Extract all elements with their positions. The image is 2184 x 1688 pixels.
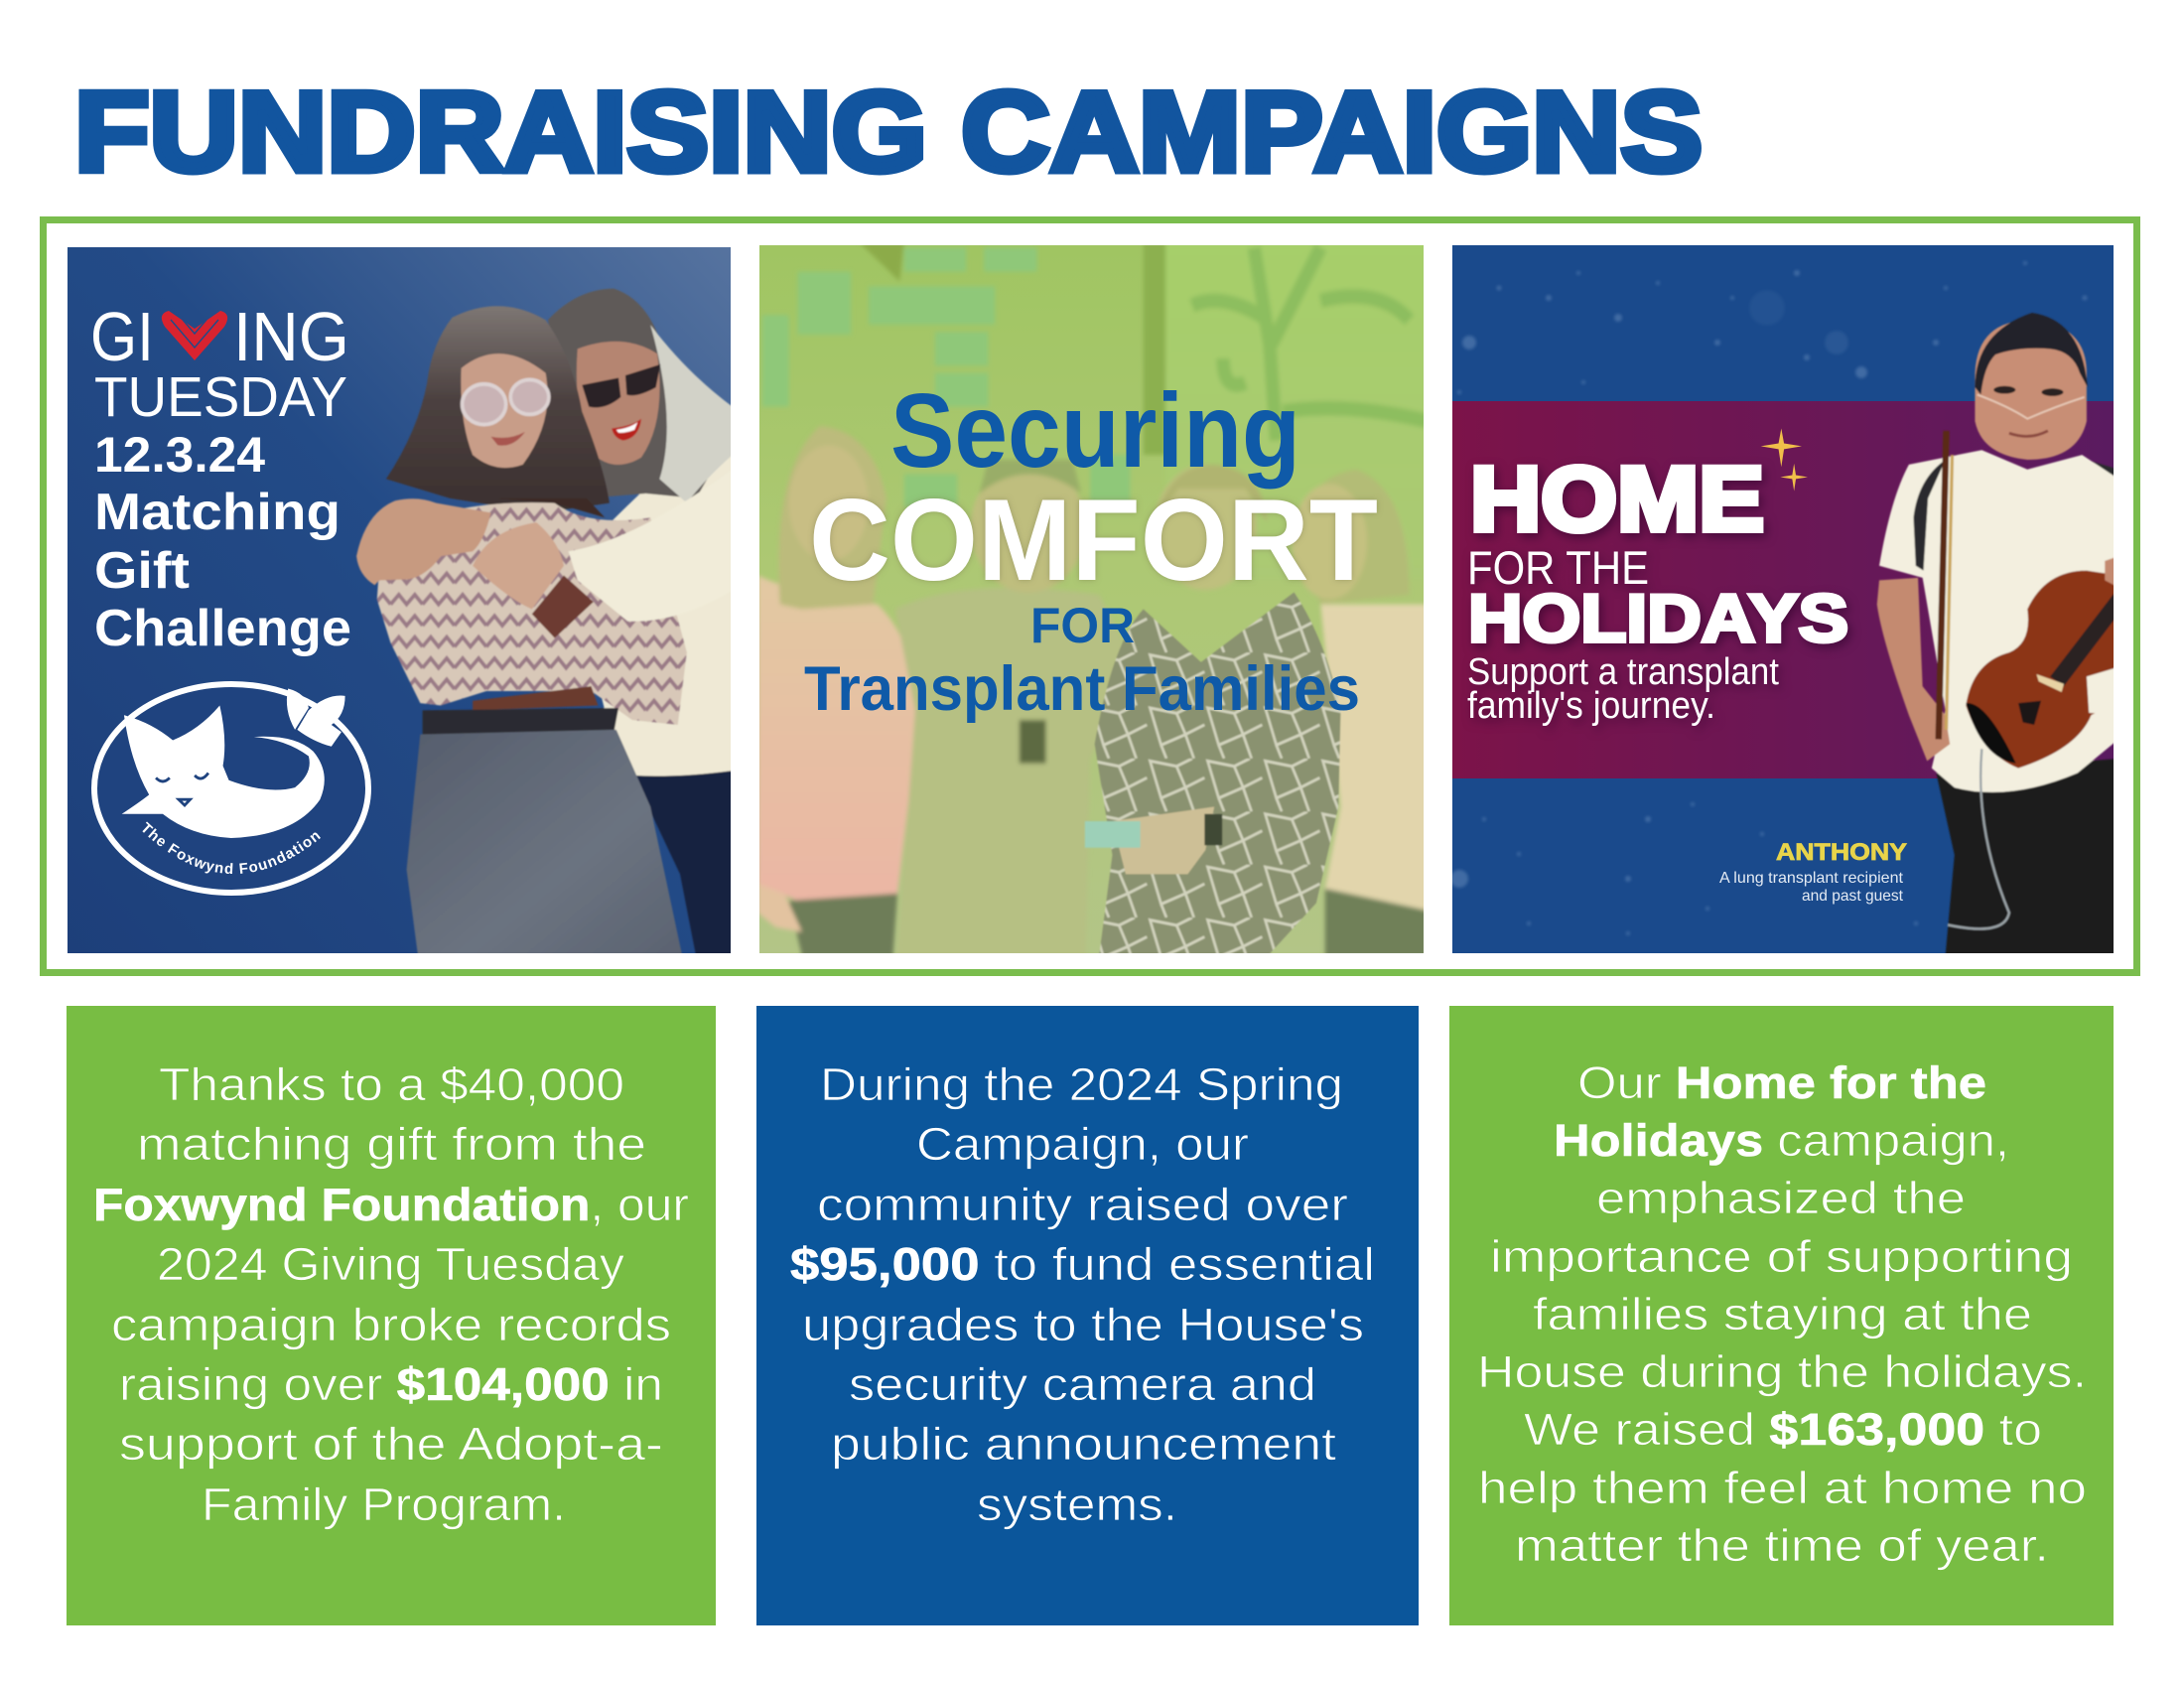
- text: Home for the Holidays headline: FOR THE: [1467, 541, 1649, 594]
- text: Home for the Holidays headline: Support a transplant: [1467, 651, 1779, 693]
- text: Securing Comfort headline: COMFORT: [809, 475, 1378, 605]
- panel: Home for the Holidays description: We raised $163,000 to: [1524, 1404, 2042, 1455]
- panel: Home for the Holidays description: House during the holidays.: [1477, 1346, 2087, 1397]
- panel: Spring Campaign description: security camera and: [849, 1358, 1316, 1410]
- photo: four people with green overlay: [757, 243, 1427, 956]
- text: Giving Tuesday heading: ING: [233, 298, 349, 375]
- maroon banner: [1451, 401, 2114, 778]
- snow speckles: [1450, 261, 2087, 935]
- text: Giving Tuesday heading: [90, 298, 351, 657]
- text: Giving Tuesday heading: 12.3.24: [94, 427, 265, 483]
- panel: Giving Tuesday description: raising over $104,000 in: [119, 1358, 663, 1410]
- text: Giving Tuesday heading: TUESDAY: [94, 365, 347, 429]
- text: Home for the Holidays headline: family's journey.: [1467, 685, 1715, 727]
- panel: Spring Campaign description: community raised over: [817, 1179, 1348, 1230]
- panel: Spring Campaign description: During the 2024 Spring: [820, 1058, 1343, 1110]
- panel: Securing Comfort image: [757, 243, 1427, 956]
- text: Giving Tuesday heading: Challenge: [94, 600, 351, 657]
- photo: mother and daughter hugging: [356, 289, 733, 956]
- panel: Spring Campaign description: upgrades to the House's: [802, 1299, 1364, 1350]
- panel: Giving Tuesday description: [67, 1006, 716, 1625]
- text: Securing Comfort headline: FOR: [1030, 598, 1135, 653]
- logo: The Foxwynd Foundation: The Foxwynd Foundation: [143, 822, 321, 874]
- text: Home for the Holidays headline: HOLIDAYS: [1468, 581, 1848, 656]
- panel: Spring Campaign description: [756, 1006, 1419, 1625]
- panel: Home for the Holidays description: Our Home for the: [1577, 1057, 1986, 1108]
- text: Giving Tuesday heading: Gift: [94, 542, 190, 600]
- panel: Giving Tuesday description: support of the Adopt-a-: [119, 1418, 663, 1470]
- panel: Home for the Holidays description: Holidays campaign,: [1554, 1115, 2009, 1166]
- panel: Giving Tuesday image: [68, 247, 731, 953]
- text: Giving Tuesday heading: Matching: [94, 484, 341, 541]
- panel: Spring Campaign description: public announcement: [831, 1418, 1336, 1470]
- text: Securing Comfort headline: Transplant Families: [804, 654, 1360, 724]
- text: Giving Tuesday heading: GI: [90, 298, 154, 375]
- panel: Home for the Holidays description: importance of supporting: [1490, 1231, 2073, 1282]
- panel: Spring Campaign description: systems.: [977, 1478, 1177, 1530]
- panel: Spring Campaign description: Campaign, our: [916, 1118, 1249, 1170]
- panel: Giving Tuesday description: Thanks to a $40,000: [159, 1058, 624, 1110]
- panel: Giving Tuesday description: matching gift from the: [137, 1118, 646, 1170]
- title: FUNDRAISING CAMPAIGNS: [74, 70, 1703, 196]
- logo: The Foxwynd Foundation: [91, 681, 371, 896]
- green image frame: [44, 220, 2136, 973]
- text: Securing Comfort headline: Securing: [890, 372, 1300, 490]
- caption: Anthony: A lung transplant recipient: [1719, 870, 1904, 887]
- text: Home for the Holidays headline: [1467, 449, 1848, 727]
- panel: Home for the Holidays description: help them feel at home no: [1478, 1463, 2087, 1513]
- panel: Giving Tuesday description: campaign broke records: [111, 1299, 671, 1350]
- icon: Giving Tuesday heart: [162, 311, 227, 360]
- panel: Giving Tuesday description: Family Program.: [202, 1478, 566, 1530]
- text: Securing Comfort headline: [804, 372, 1378, 724]
- panel: Home for the Holidays image: [1450, 245, 2118, 956]
- panel: Giving Tuesday description: 2024 Giving Tuesday: [157, 1238, 624, 1290]
- panel: Home for the Holidays description: emphasized the: [1596, 1173, 1966, 1223]
- panel: Home for the Holidays description: [1449, 1006, 2114, 1625]
- panel: Giving Tuesday description: Foxwynd Foundation , our: [93, 1179, 689, 1230]
- photo: Anthony with violin: [1877, 313, 2118, 956]
- icon: gold sparkles: [1761, 428, 1808, 492]
- panel: Home for the Holidays description: families staying at the: [1533, 1289, 2032, 1339]
- panel: Spring Campaign description: $95,000 to fund essential: [790, 1238, 1375, 1290]
- panel: Home for the Holidays description: matter the time of year.: [1515, 1520, 2049, 1571]
- text: Home for the Holidays headline: HOME: [1470, 449, 1764, 550]
- caption: Anthony: [1719, 839, 1907, 905]
- caption: Anthony: and past guest: [1802, 888, 1904, 905]
- caption: Anthony: ANTHONY: [1776, 839, 1907, 866]
